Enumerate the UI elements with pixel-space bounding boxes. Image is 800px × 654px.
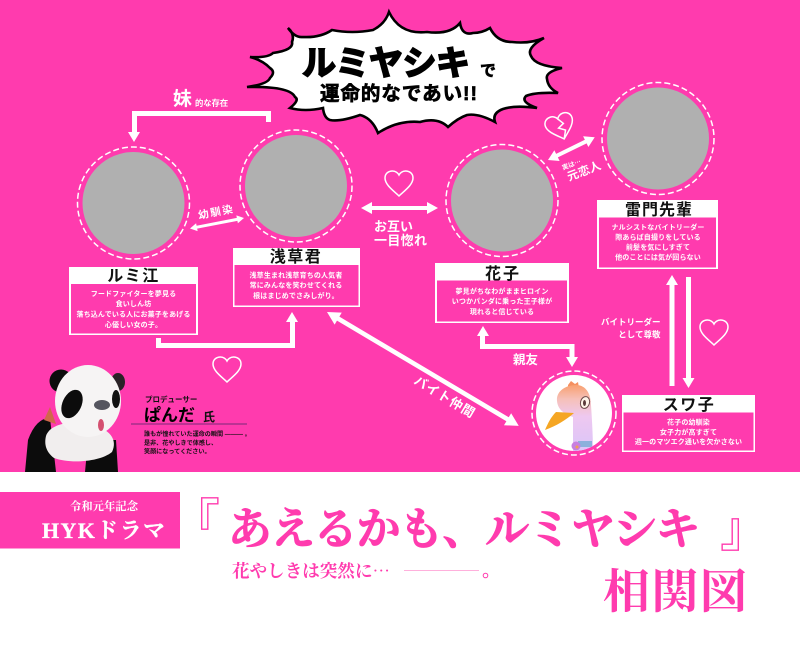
name: 浅草君: 浅草君 [270, 247, 322, 266]
name: ルミ江: ルミ江 [107, 267, 160, 285]
description: ルミ江: フードファイターを夢見る [91, 289, 176, 298]
description: ルミ江: 心優しい女の子。 [105, 320, 162, 329]
description: 花子: いつかパンダに乗った王子様が [452, 296, 552, 306]
description: スワ子: 週一のマツエク通いを欠かさない [635, 437, 742, 446]
label: best friends: 親友 [513, 352, 539, 367]
label: ex lovers: 実は… [560, 156, 582, 172]
heart: スワ子 loves 雷門先輩 [700, 320, 728, 345]
banner: HYK drama [0, 492, 180, 548]
character: bird portrait [532, 371, 616, 455]
tagline [232, 558, 488, 583]
character: ルミ江 portrait [78, 147, 190, 259]
card: 花子 [435, 263, 569, 323]
main title [170, 495, 770, 557]
producer credit [131, 394, 251, 456]
title text: あえるかも、ルミヤシキ [228, 505, 700, 554]
banner small line: 令和元年記念 [70, 499, 139, 513]
card: 雷門先輩 [597, 200, 718, 269]
description: ルミ江: 食いしん坊 [116, 299, 151, 308]
subtitle: correlation chart: 相関図 [603, 567, 747, 619]
character: 浅草君 portrait [240, 130, 352, 242]
description: 浅草君 [250, 270, 342, 300]
arrow: sister relationship [128, 114, 268, 142]
burst title で: で [480, 63, 496, 80]
name: 雷門先輩: 雷門先輩 [625, 200, 693, 219]
speech burst title [247, 12, 562, 133]
producer message: 是非、花やしきで体感し、 [144, 439, 217, 447]
description: ルミ江 [76, 289, 191, 329]
label: part-time coworkers: バイト仲間 [411, 373, 477, 421]
title opening bracket: 『 [170, 495, 220, 551]
arrow: ex lovers [545, 132, 597, 165]
pink background panel [0, 0, 800, 472]
arrow: mutual love [361, 202, 438, 214]
character: 花子 portrait [446, 144, 558, 256]
character: 雷門先輩 portrait [602, 82, 714, 194]
label: respect for leader: として尊敬 [618, 330, 661, 340]
arrow: respect upward [666, 275, 678, 386]
label: mutual love: お互い [374, 219, 413, 234]
heart: mutual love [385, 171, 413, 196]
icon: broken heart [543, 111, 578, 143]
burst subtitle: 運命的なであい!! [320, 83, 477, 105]
heart: ルミ江 loves 浅草君 [213, 357, 241, 382]
description: スワ子 [635, 418, 742, 446]
description: 浅草君: 根はまじめでさみしがり。 [253, 291, 339, 300]
tagline: 花やしきは突然に… [232, 558, 390, 583]
producer message: 誰もが憧れていた運命の瞬間 ――― 。 [144, 430, 251, 438]
label: mutual love [374, 219, 427, 248]
arrow: love downward [682, 277, 694, 388]
label: mutual love: 一目惚れ [374, 233, 427, 248]
card: 浅草君 [233, 247, 360, 307]
description: スワ子: 花子の幼馴染 [667, 418, 710, 426]
label: ex lovers: 元恋人 [565, 158, 603, 184]
arrow: childhood friends [189, 214, 245, 232]
description: スワ子: 女子力が高すぎて [660, 428, 717, 436]
card: ルミ江 [69, 267, 198, 335]
description: ルミ江: 落ち込んでいる人にお菓子をあげる [76, 310, 191, 318]
label: respect for leader: バイトリーダー [601, 317, 660, 327]
label: sister [173, 88, 228, 110]
arrow: part-time coworkers [323, 306, 522, 432]
arrow: best friends [477, 326, 578, 367]
burst outline [247, 12, 562, 133]
description: 雷門先輩: 前髪を気にしすぎて [626, 242, 690, 252]
description: 雷門先輩: ナルシストなバイトリーダー [612, 222, 704, 232]
title closing bracket: 』 [720, 501, 770, 557]
producer message: 笑顔になってください。 [144, 448, 211, 456]
description: 花子 [452, 286, 552, 316]
label: sister: 妹 [173, 88, 192, 110]
label: sister: 的な存在 [195, 98, 228, 108]
description: 雷門先輩 [612, 222, 704, 262]
burst title main: ルミヤシキ [302, 45, 470, 83]
producer name: ぱんだ [144, 406, 195, 425]
description: 花子: 現れると信じている [470, 307, 534, 316]
label: respect for leader [601, 317, 661, 340]
label: childhood friends: 幼馴染 [197, 202, 234, 222]
producer suffix: 氏 [203, 409, 215, 424]
icon: bird [545, 381, 593, 455]
description: 雷門先輩: 隙あらば自撮りをしている [615, 232, 701, 242]
banner large line: HYKドラマ [42, 518, 165, 543]
card: スワ子 [622, 395, 755, 452]
icon: panda producer [25, 365, 125, 472]
description: 雷門先輩: 他のことには気が回らない [615, 252, 701, 262]
name: スワ子: スワ子 [663, 397, 715, 414]
description: 花子: 夢見がちなわがままヒロイン [456, 286, 548, 296]
arrow: ルミ江 to 浅草君 [158, 312, 298, 346]
name: 花子: 花子 [485, 264, 521, 283]
producer message [144, 430, 251, 456]
description: 浅草君: 常にみんなを笑わせてくれる [250, 280, 342, 290]
producer role: プロデューサー [145, 394, 197, 404]
description: 浅草君: 浅草生まれ浅草育ちの人気者 [250, 270, 342, 280]
